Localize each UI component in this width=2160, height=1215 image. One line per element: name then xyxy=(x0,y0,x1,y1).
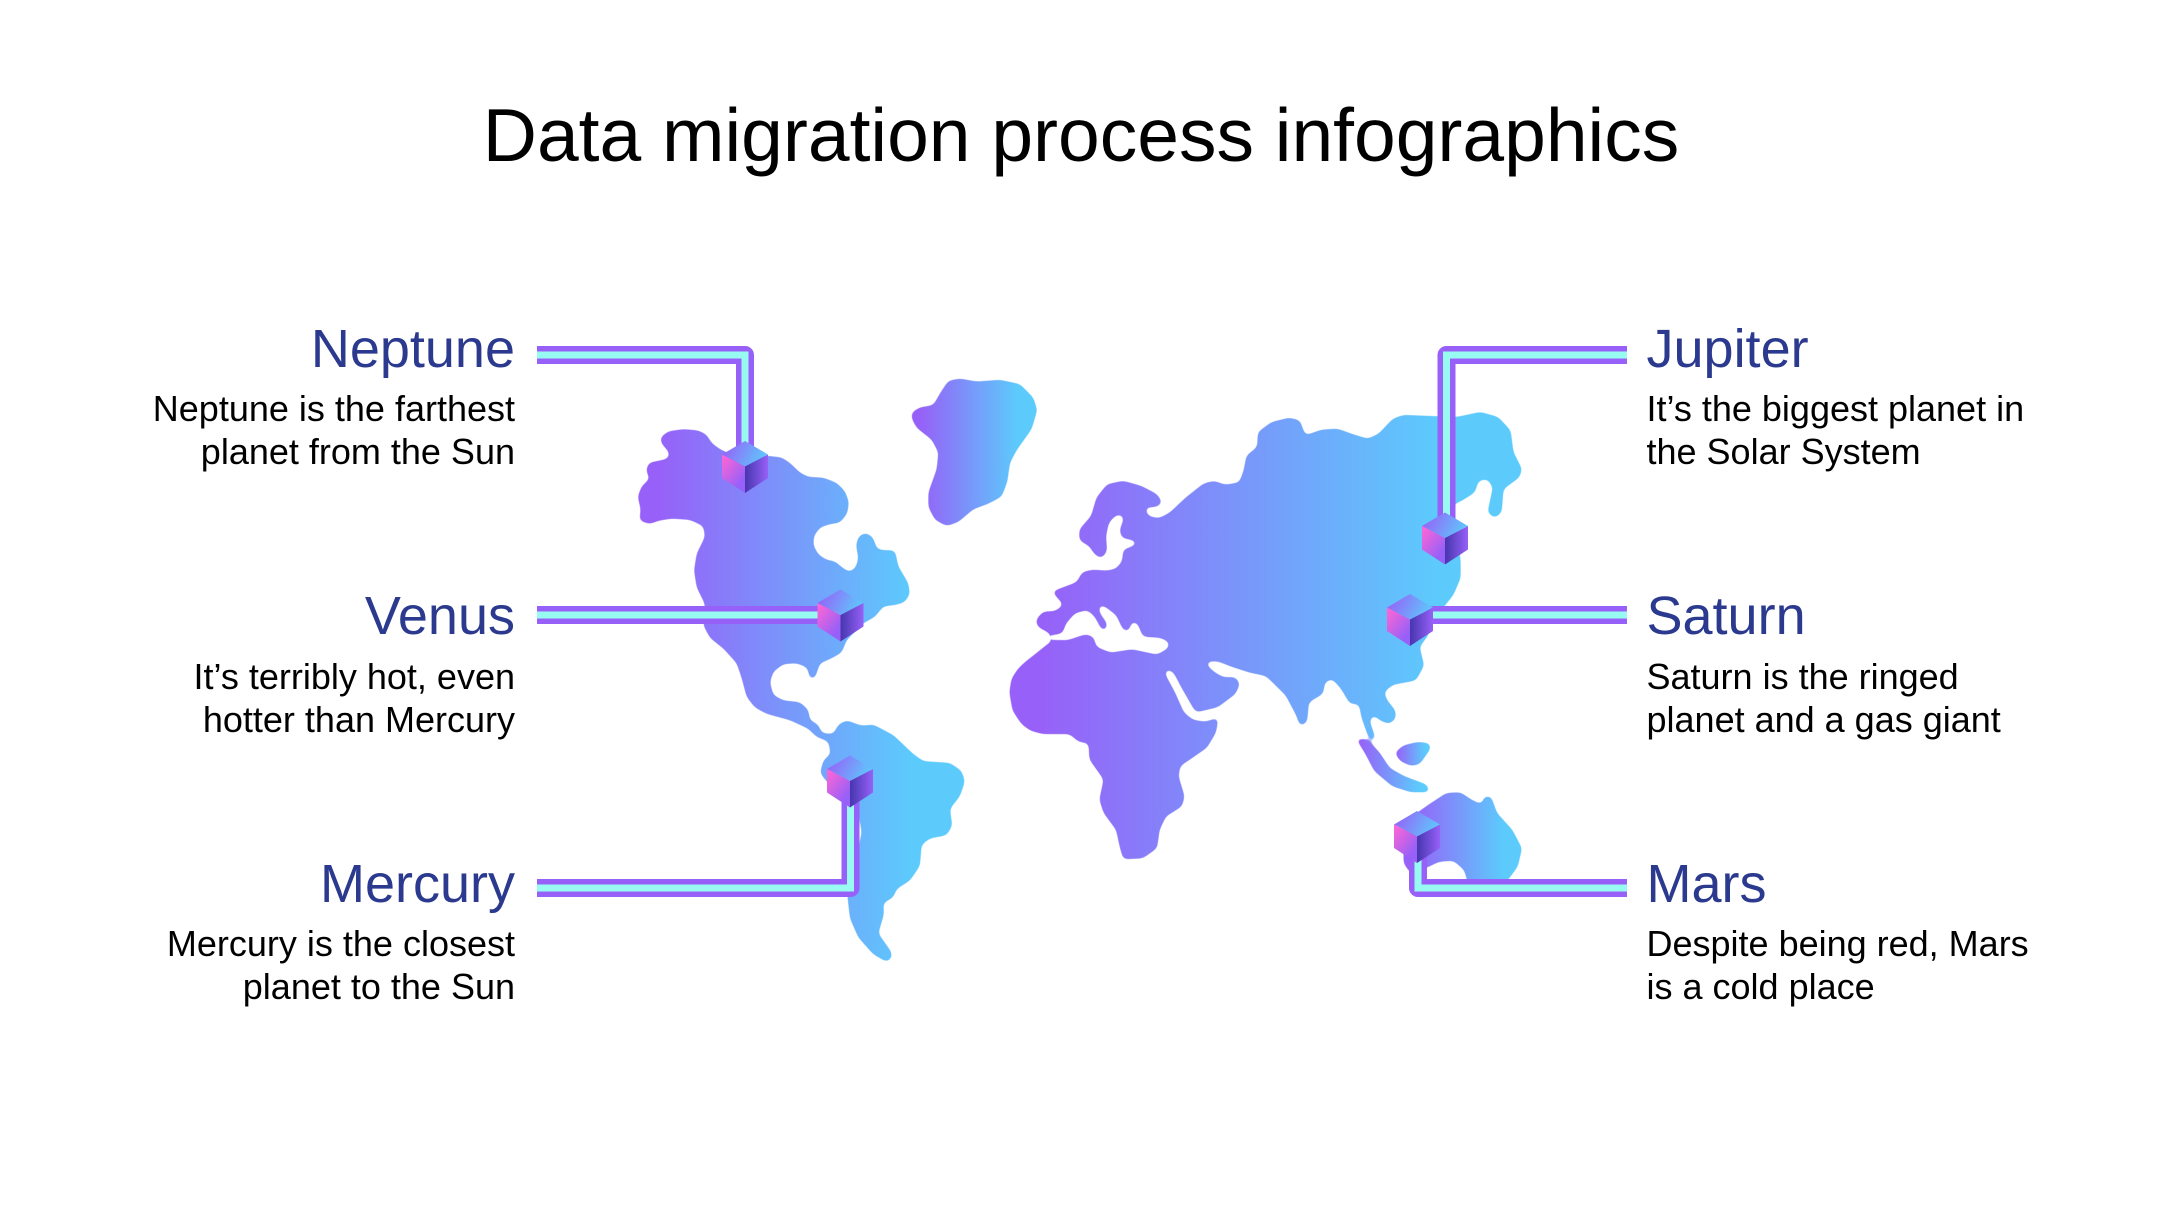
icon: cube Saturn xyxy=(1387,594,1433,646)
map: Australia xyxy=(1404,792,1522,884)
map: Mediterranean Sea xyxy=(1046,606,1170,655)
connector: Jupiter xyxy=(1446,355,1627,525)
icon: cube Jupiter xyxy=(1422,512,1468,564)
text block: Jupiter: the Solar System xyxy=(1646,431,1921,472)
map: Borneo xyxy=(1395,742,1430,766)
text block: Saturn: planet and a gas giant xyxy=(1646,699,2001,740)
icon: cube Mercury xyxy=(827,756,873,808)
icon: cube Mars xyxy=(1394,811,1440,863)
map: Greenland xyxy=(912,379,1037,526)
text block: Saturn: Saturn xyxy=(1646,586,1806,646)
text block: Neptune: Neptune is the farthest xyxy=(153,388,515,429)
text block: Venus xyxy=(194,586,515,740)
text block: Mercury: Mercury is the closest xyxy=(167,923,515,964)
text block: Venus: hotter than Mercury xyxy=(203,699,515,740)
text block: Mars: Mars xyxy=(1646,854,1766,914)
map: Eurasia and Africa xyxy=(1009,412,1522,859)
text block: Neptune: planet from the Sun xyxy=(201,431,515,472)
text block: Venus: Venus xyxy=(365,586,515,646)
text block: Mercury: planet to the Sun xyxy=(243,966,515,1007)
text block: Venus: It’s terribly hot, even xyxy=(194,656,515,697)
text block: Mercury: Mercury xyxy=(320,854,515,914)
text block: Jupiter: It’s the biggest planet in xyxy=(1646,388,2024,429)
text block: Neptune xyxy=(153,319,515,472)
text block: Jupiter: Jupiter xyxy=(1646,319,1809,379)
map: the Americas xyxy=(638,429,965,962)
connector: Venus xyxy=(537,606,845,624)
map: Sumatra and Java xyxy=(1355,738,1430,792)
text block: Mars: Despite being red, Mars xyxy=(1646,923,2029,964)
icon: cube Venus xyxy=(818,590,864,642)
connector: Mars xyxy=(1418,850,1627,888)
world map xyxy=(638,379,1522,962)
icon: cube Neptune xyxy=(722,441,768,493)
text block: Saturn: Saturn is the ringed xyxy=(1646,656,1959,697)
text block: Saturn xyxy=(1646,586,2001,740)
text block: Mars xyxy=(1646,854,2029,1007)
text block: Mercury xyxy=(167,854,515,1007)
connector: Mercury xyxy=(537,790,850,888)
text block: Mars: is a cold place xyxy=(1646,966,1875,1007)
title: Data migration process infographics xyxy=(483,93,1679,177)
text block: Jupiter xyxy=(1646,319,2024,472)
connector: Saturn xyxy=(1420,606,1627,624)
connector: Neptune xyxy=(537,355,745,455)
text block: Neptune: Neptune xyxy=(311,319,515,379)
